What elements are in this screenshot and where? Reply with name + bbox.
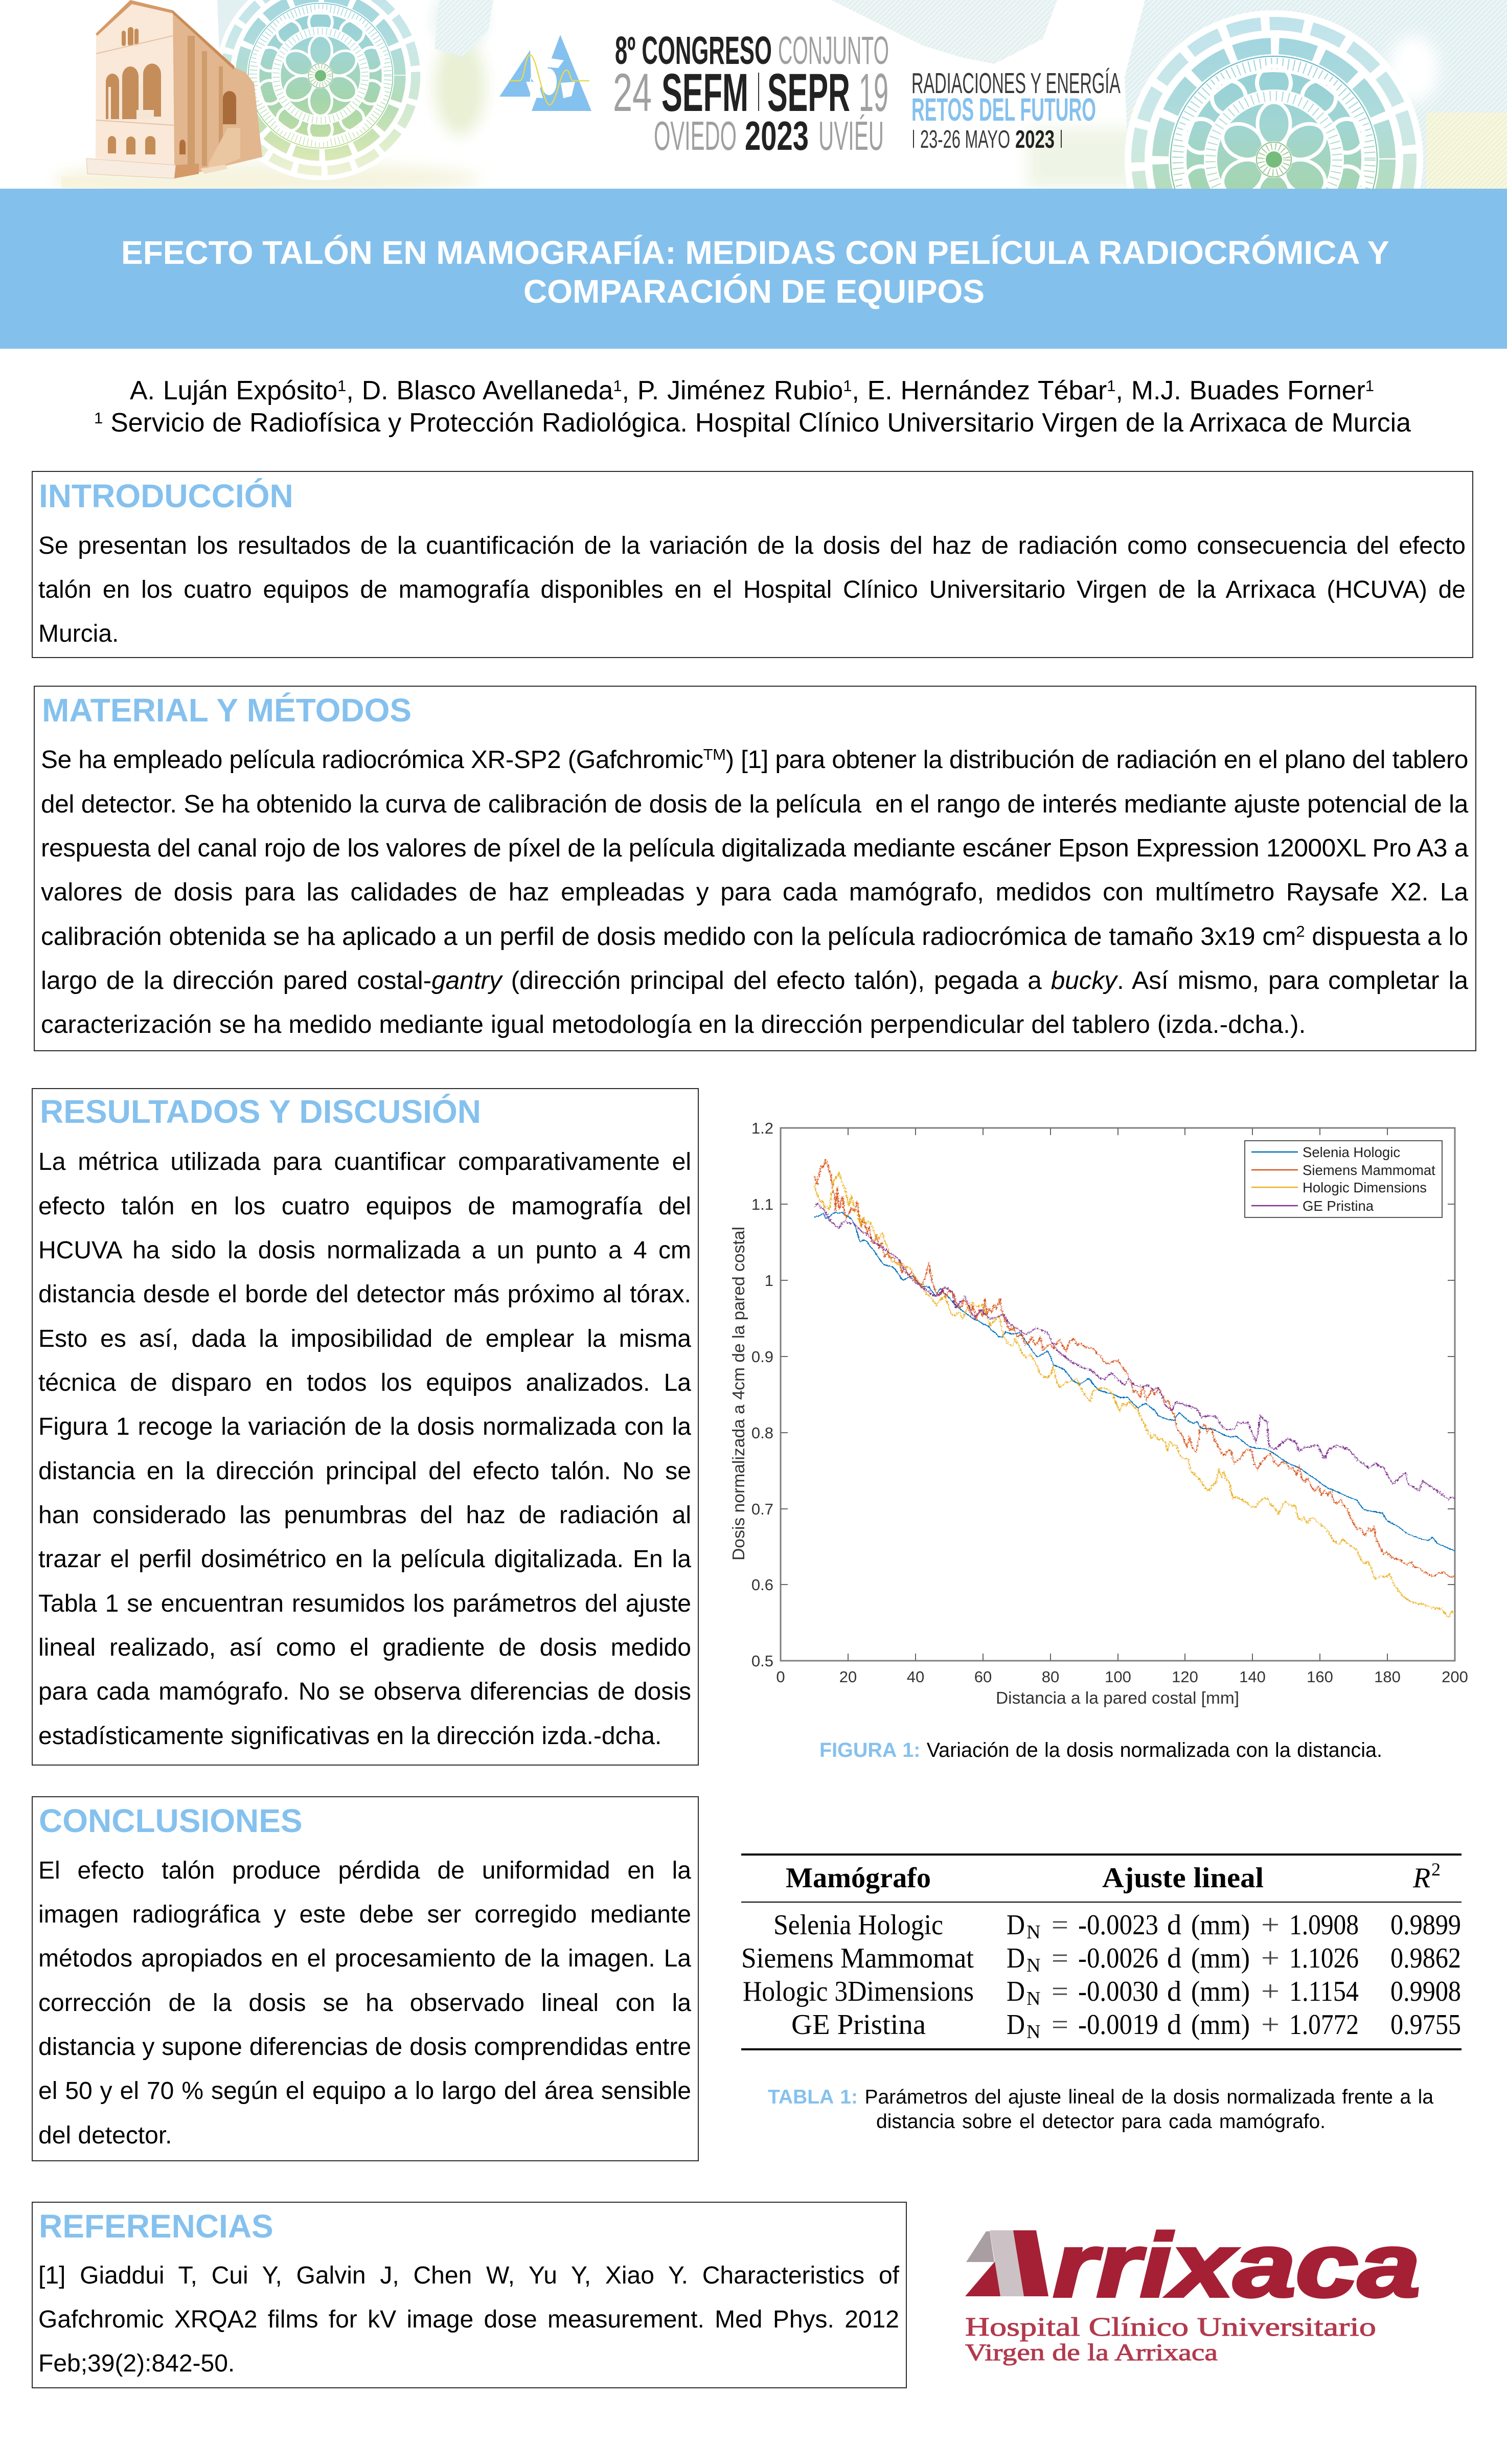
table row: GE Pristina: 1.0772 [1289, 2009, 1359, 2041]
table row: Hologic 3Dimensions: + [1261, 1976, 1280, 2007]
table row: Selenia Hologic: = [1052, 1909, 1068, 1941]
table row: Siemens Mammomat: N [1026, 1955, 1040, 1976]
x axis tick labels: 60 [974, 1668, 992, 1686]
congress motto: 23-26 MAYO [920, 126, 1010, 153]
caption: tabla 1: TABLA 1: Parámetros del ajuste lineal de la dosis normalizada frente a la [768, 2086, 1433, 2108]
text: conclusiones [38, 1857, 691, 2149]
x axis tick labels: 160 [1307, 1668, 1333, 1686]
x axis tick labels: 100 [1105, 1668, 1131, 1686]
text: material y métodos [41, 745, 1468, 1038]
text: material y métodos: valores de dosis para las calidades de haz empleadas y para cada mamógrafo, medidos con multímetro Raysafe X2. La [41, 878, 1468, 906]
text: referencias [38, 2262, 900, 2377]
logo hospital name: Hospital Clínico Universitario [965, 2313, 1376, 2342]
chart legend: Selenia Hologic [1303, 1144, 1400, 1160]
text: conclusiones: imagen radiográfica y este debe ser corregido mediante [38, 1901, 691, 1928]
table row: Siemens Mammomat: -0.0026 [1078, 1942, 1158, 1974]
congress motto [911, 67, 1121, 153]
curve: GE Pristina [814, 1203, 1455, 1499]
y axis tick labels: 1 [765, 1272, 773, 1290]
text: referencias: Gafchromic XRQA2 films for kV image dose measurement. Med Phys. 2012 [38, 2306, 899, 2333]
congress wordmark [613, 29, 889, 159]
watercolour washes [51, 0, 1507, 196]
table row: Siemens Mammomat: (mm) [1191, 1942, 1250, 1974]
x axis tick labels [776, 1668, 1468, 1686]
x axis tick labels: 20 [839, 1668, 857, 1686]
text: resultados y discusión: estadísticamente significativas en la dirección izda.-dcha. [38, 1723, 661, 1750]
text: resultados y discusión: lineal realizado, así como el gradiente de dosis medido [38, 1634, 691, 1661]
text: resultados y discusión: trazar el perfil dosimétrico en la película digitalizada. En la [38, 1546, 691, 1573]
title band: COMPARACIÓN DE EQUIPOS [523, 273, 985, 310]
heading: material y métodos: MATERIAL Y MÉTODOS [42, 692, 412, 729]
authors and affiliation: A. Luján Expósito1, D. Blasco Avellaneda1, P. Jiménez Rubio1, E. Hernández Tébar1, M.J. Buades Forner1 [130, 375, 1374, 405]
text: conclusiones: El efecto talón produce pérdida de uniformidad en la [38, 1857, 691, 1884]
y axis tick labels: 1.2 [751, 1119, 773, 1137]
large arches [106, 63, 161, 119]
y axis tick labels: 0.8 [751, 1424, 773, 1442]
table row: Selenia Hologic: 1.0908 [1289, 1909, 1359, 1941]
text: resultados y discusión: distancia desde el borde del detector más próximo al tórax. [38, 1281, 691, 1308]
caption: figura 1: FIGURA 1: Variación de la dosis normalizada con la distancia. [819, 1739, 1382, 1761]
x axis title: Distancia a la pared costal [mm] [996, 1689, 1239, 1708]
table row: Siemens Mammomat: + [1261, 1942, 1280, 1974]
line chart: figura 1 [729, 1119, 1468, 1708]
x axis tick labels: 200 [1442, 1668, 1468, 1686]
upper window trio [122, 27, 139, 46]
text: resultados y discusión: Esto es así, dada la imposibilidad de emplear la misma [38, 1325, 691, 1352]
text: resultados y discusión: HCUVA ha sido la dosis normalizada a un punto a 4 cm [38, 1237, 691, 1264]
table row: Hologic 3Dimensions: 1.1154 [1289, 1976, 1359, 2007]
table row: Hologic 3Dimensions: 0.9908 [1390, 1976, 1461, 2007]
heading: referencias: REFERENCIAS [39, 2208, 273, 2245]
table row: Siemens Mammomat [741, 1942, 1461, 1976]
y axis tick labels: 0.9 [751, 1348, 773, 1366]
y axis tick labels: 0.6 [751, 1576, 773, 1594]
curve: Selenia Hologic [814, 1212, 1455, 1551]
chart legend: Siemens Mammomat [1303, 1162, 1435, 1178]
heading: introducción: INTRODUCCIÓN [39, 478, 293, 514]
table row: Selenia Hologic: d [1167, 1909, 1181, 1941]
table row: Hologic 3Dimensions [743, 1976, 1461, 2009]
panel: resultados y discusión [32, 1088, 699, 1766]
congress motto: RADIACIONES Y ENERGÍA [911, 67, 1121, 100]
left rosette [216, 0, 425, 180]
table row: GE Pristina: + [1261, 2009, 1280, 2041]
table header row: Mamógrafo [786, 1862, 931, 1894]
congress wordmark: SEFM [661, 63, 748, 123]
table header row [786, 1859, 1441, 1894]
x axis tick labels: 180 [1374, 1668, 1401, 1686]
text: resultados y discusión: técnica de disparo en todos los equipos analizados. La [38, 1369, 691, 1396]
text: material y métodos: caracterización se ha medido mediante igual metodología en la dirección perpendicular del tablero (izda.-dcha.). [41, 1010, 1306, 1038]
table row: GE Pristina: (mm) [1191, 2009, 1250, 2041]
x axis tick labels: 40 [907, 1668, 924, 1686]
stairs [209, 128, 240, 171]
table row: Siemens Mammomat: 0.9862 [1390, 1942, 1461, 1974]
logo mark: stylised A [965, 2230, 1048, 2296]
text: conclusiones: corrección de la dosis se ha observado lineal con la [38, 1990, 691, 2017]
text: referencias: [1] Giaddui T, Cui Y, Galvin J, Chen W, Yu Y, Xiao Y. Characteristics of [38, 2262, 899, 2289]
congress motto: 2023 [1015, 126, 1055, 153]
logo hospital name: Virgen de la Arrixaca [965, 2339, 1218, 2366]
table row: GE Pristina [791, 2009, 1461, 2043]
caption: tabla 1: distancia sobre el detector para cada mamógrafo. [876, 2111, 1326, 2133]
text: conclusiones: el 50 y el 70 % según el equipo a lo largo del área sensible [38, 2077, 691, 2105]
table row: Hologic 3Dimensions: = [1052, 1976, 1068, 2007]
table row: Selenia Hologic: (mm) [1191, 1909, 1250, 1941]
title band: EFECTO TALÓN EN MAMOGRAFÍA: MEDIDAS CON PELÍCULA RADIOCRÓMICA Y [121, 234, 1389, 271]
y axis tick labels: 0.7 [751, 1500, 773, 1518]
table row: Selenia Hologic: -0.0023 [1078, 1909, 1158, 1941]
text: introducción: Murcia. [38, 620, 119, 647]
heading: resultados y discusión: RESULTADOS Y DISCUSIÓN [40, 1093, 481, 1130]
table header row: R [1412, 1862, 1430, 1894]
text: resultados y discusión: han considerado las penumbras del haz de radiación al [38, 1502, 691, 1529]
panel: material y métodos [34, 686, 1476, 1051]
chart legend: GE Pristina [1303, 1198, 1374, 1214]
congress motto: RETOS DEL FUTURO [911, 92, 1096, 128]
table row: Hologic 3Dimensions: D [1007, 1976, 1025, 2007]
chart legend [1245, 1141, 1442, 1217]
text: introducción [38, 532, 1466, 647]
table row: Selenia Hologic: + [1261, 1909, 1280, 1941]
x axis tick labels: 0 [776, 1668, 785, 1686]
lower arches [108, 91, 236, 154]
text: conclusiones: del detector. [38, 2122, 172, 2149]
table header row: Ajuste lineal [1102, 1862, 1264, 1894]
text: material y métodos: Se ha empleado película radiocrómica XR-SP2 (GafchromicTM) [1] para obtener la distribución de radiación en el plano del tablero [41, 745, 1468, 774]
authors and affiliation: 1 Servicio de Radiofísica y Protección Radiológica. Hospital Clínico Universitario Virgen de la Arrixaca de Murcia [94, 408, 1411, 437]
text: resultados y discusión: La métrica utilizada para cuantificar comparativamente el [38, 1148, 691, 1176]
table row: GE Pristina: 0.9755 [1390, 2009, 1461, 2041]
table row: GE Pristina: D [1007, 2009, 1025, 2041]
text: conclusiones: distancia y supone diferencias de dosis comprendidas entre [38, 2033, 691, 2061]
hospital logo: Arrixaca [961, 2224, 1426, 2367]
panel: introducción [32, 471, 1473, 658]
table: parámetros del ajuste lineal [736, 1846, 1467, 2055]
x axis tick labels: 140 [1239, 1668, 1266, 1686]
text: resultados y discusión: Tabla 1 se encuentran resumidos los parámetros del ajuste [38, 1590, 691, 1617]
table row: Hologic 3Dimensions: d [1167, 1976, 1181, 2007]
title band [0, 189, 1507, 349]
y axis title: Dosis normalizada a 4cm de la pared costal [729, 1227, 748, 1561]
text: resultados y discusión: para cada mamógrafo. No se observa diferencias de dosis [38, 1678, 691, 1705]
table row: Hologic 3Dimensions: N [1026, 1988, 1040, 2009]
congress wordmark: CONJUNTO [778, 29, 889, 73]
table row: Siemens Mammomat: = [1052, 1942, 1068, 1974]
header banner artwork [54, 0, 1507, 189]
right rosette [1125, 10, 1423, 309]
text: resultados y discusión: Figura 1 recoge la variación de la dosis normalizada con la [38, 1413, 691, 1440]
table row: Selenia Hologic: Selenia Hologic [773, 1909, 943, 1941]
heading: conclusiones: CONCLUSIONES [39, 1802, 303, 1839]
text: material y métodos: largo de la dirección pared costal-gantry (dirección principal del efecto talón), pegada a bucky. Así mismo, para completar la [41, 966, 1468, 994]
congress wordmark: SEPR [767, 63, 850, 123]
curve: Hologic Dimensions [814, 1173, 1455, 1617]
panel: referencias [32, 2202, 907, 2388]
congress wordmark: 19 [859, 63, 888, 123]
table row: Siemens Mammomat: d [1167, 1942, 1181, 1974]
table row: GE Pristina: -0.0019 [1078, 2009, 1158, 2041]
text: resultados y discusión: efecto talón en los cuatro equipos de mamografía del [38, 1193, 691, 1220]
table row: GE Pristina: d [1167, 2009, 1181, 2041]
chart legend: Hologic Dimensions [1303, 1180, 1427, 1195]
table row: Selenia Hologic [773, 1909, 1461, 1943]
table row: Hologic 3Dimensions: Hologic 3Dimensions [743, 1976, 974, 2007]
logo hospital name [965, 2313, 1376, 2366]
table row: Siemens Mammomat: 1.1026 [1289, 1942, 1359, 1974]
caption: tabla 1 [768, 2085, 1433, 2136]
y axis tick labels [751, 1119, 773, 1670]
authors and affiliation [94, 375, 1411, 437]
text: material y métodos: del detector. Se ha obtenido la curva de calibración de dosis de la película en el rango de interés mediante ajuste potencial de la [41, 790, 1468, 818]
table row: Siemens Mammomat: Siemens Mammomat [741, 1942, 974, 1974]
table row: GE Pristina: = [1052, 2009, 1068, 2041]
table row: Selenia Hologic: 0.9899 [1390, 1909, 1461, 1941]
x axis tick labels: 120 [1172, 1668, 1198, 1686]
y axis tick labels: 1.1 [751, 1195, 773, 1213]
building illustration [61, 0, 302, 188]
table row: Selenia Hologic: D [1007, 1909, 1025, 1941]
table row: Hologic 3Dimensions: (mm) [1191, 1976, 1250, 2007]
table row: Siemens Mammomat: D [1007, 1942, 1025, 1974]
text: material y métodos: calibración obtenida se ha aplicado a un perfil de dosis medido con la película radiocrómica de tamaño 3x19 cm2 dispuesta a lo [41, 922, 1468, 951]
text: introducción: Se presentan los resultados de la cuantificación de la variación de la dosis del haz de radiación como consecuencia del efecto [38, 532, 1466, 559]
congress wordmark: UVIÉU [818, 113, 884, 159]
panel: conclusiones [32, 1796, 699, 2161]
text: resultados y discusión: distancia en la dirección principal del efecto talón. No se [38, 1458, 691, 1485]
table row: GE Pristina: GE Pristina [791, 2009, 926, 2041]
text: resultados y discusión [38, 1148, 691, 1750]
text: referencias: Feb;39(2):842-50. [38, 2350, 235, 2377]
x axis tick labels: 80 [1042, 1668, 1059, 1686]
table row: GE Pristina: N [1026, 2021, 1040, 2043]
congress emblem [499, 35, 591, 111]
table row: Hologic 3Dimensions: -0.0030 [1078, 1976, 1158, 2007]
text: conclusiones: métodos apropiados en el procesamiento de la imagen. La [38, 1945, 691, 1972]
congress wordmark: 2023 [745, 113, 809, 159]
curve: Siemens Mammomat [814, 1159, 1455, 1577]
congress wordmark: OVIEDO [654, 113, 737, 159]
text: material y métodos: respuesta del canal rojo de los valores de píxel de la película digitalizada mediante escáner Epson Expression 12000XL Pro A3 a [41, 834, 1468, 862]
y axis tick labels: 0.5 [751, 1652, 773, 1670]
text: introducción: talón en los cuatro equipos de mamografía disponibles en el Hospital Clínico Universitario Virgen de la Arrixaca (HCUVA) de [38, 576, 1466, 603]
congress wordmark: 8º CONGRESO [615, 29, 772, 73]
table header row: 2 [1431, 1859, 1441, 1880]
table row: Selenia Hologic: N [1026, 1922, 1040, 1943]
congress wordmark: 24 [613, 63, 652, 123]
plot frame and ticks [781, 1128, 1455, 1661]
table rules [741, 1853, 1462, 2050]
